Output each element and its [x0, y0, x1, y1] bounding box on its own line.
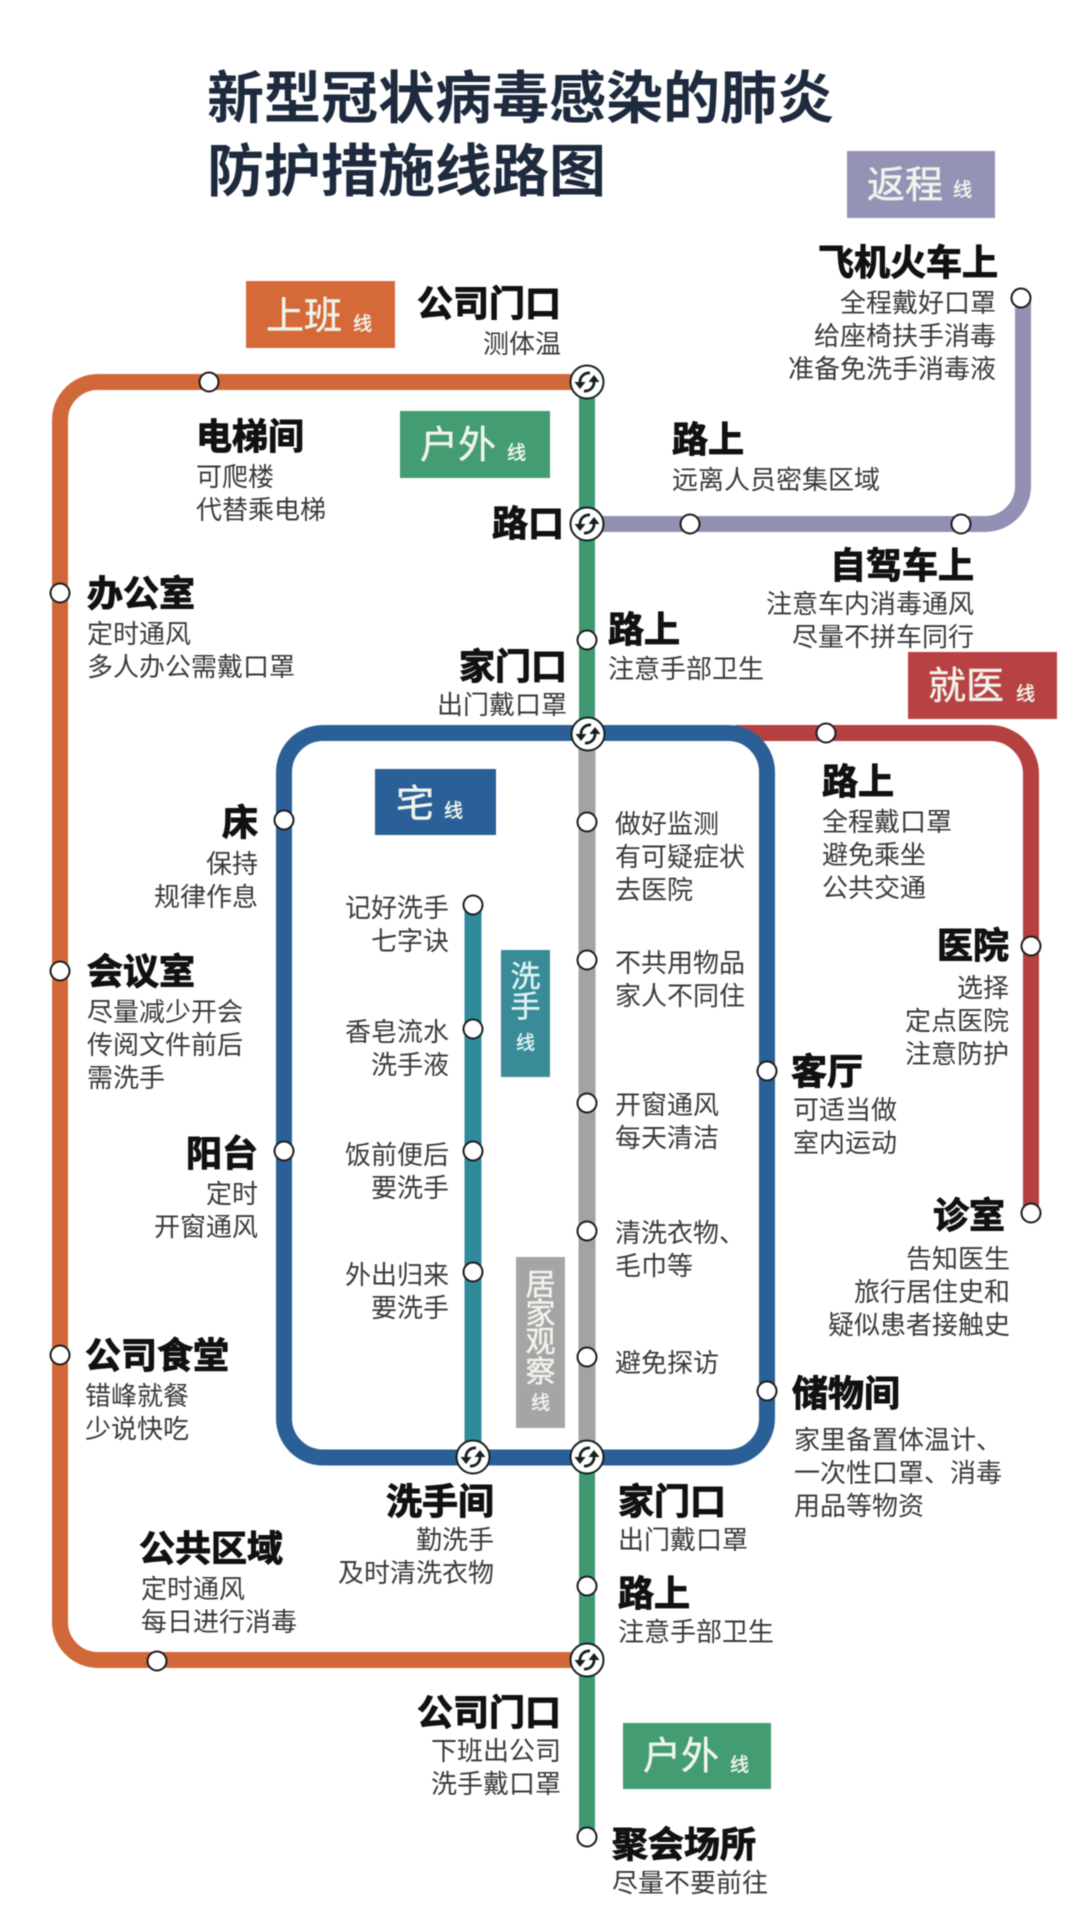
hand washing notes [345, 893, 449, 1323]
note: 不共用物品: 家人不同住 [615, 981, 745, 1011]
stop: 办公室: 定时通风 [87, 619, 191, 649]
stop: 会议室: 会议室 [87, 951, 195, 992]
line label: 宅: 宅 [396, 784, 434, 826]
stop: 飞机火车上: 准备免洗手消毒液 [788, 354, 996, 384]
note: 开窗通风 [615, 1090, 719, 1153]
stop: 飞机火车上: 给座椅扶手消毒 [814, 320, 996, 350]
stop: 公司门口 bottom [417, 1692, 561, 1799]
line label: 洗手: 线 [516, 1033, 535, 1054]
stop: 办公室: 多人办公需戴口罩 [87, 652, 295, 682]
stop: 医院: 医院 [937, 925, 1009, 966]
line label: 洗手 [501, 950, 550, 1077]
note: 开窗通风: 开窗通风 [615, 1090, 719, 1120]
stop: 床: 规律作息 [154, 882, 258, 912]
line label: 宅 [375, 769, 496, 835]
stop: 公司门口 bottom: 公司门口 [417, 1692, 561, 1733]
line label: 就医 [908, 652, 1057, 719]
stop: 公司门口 top [417, 283, 561, 358]
note: 开窗通风: 每天清洁 [615, 1123, 719, 1153]
note: 外出归来: 要洗手 [371, 1293, 449, 1323]
line label: 居家观察: 观 [526, 1326, 556, 1359]
stop: 路口: 路口 [492, 503, 564, 544]
stop: 家门口 upper [437, 646, 567, 720]
stop: 储物间: 储物间 [792, 1373, 900, 1414]
stop: 公司食堂: 公司食堂 [85, 1335, 229, 1376]
stop: 办公室 [86, 573, 295, 682]
note: 做好监测 [614, 809, 745, 905]
stop: 家门口 upper: 出门戴口罩 [437, 690, 567, 720]
stop: 洗手间: 及时清洗衣物 [338, 1558, 494, 1588]
line label: 户外 upper [400, 411, 550, 478]
stop: 洗手间: 洗手间 [386, 1481, 494, 1522]
note: 记好洗手: 七字诀 [371, 926, 449, 956]
stop: 路上 return [672, 419, 880, 494]
stop: 诊室 [828, 1195, 1010, 1340]
stop: 路上 hospital: 路上 [822, 761, 894, 802]
stop: 路上 green lower [618, 1573, 774, 1647]
stop: 家门口 lower [618, 1481, 748, 1555]
stop: 路上 green upper: 注意手部卫生 [608, 654, 764, 684]
title: 新型冠状病毒感染的肺炎 [207, 67, 834, 131]
stop: 家门口 lower: 出门戴口罩 [618, 1525, 748, 1555]
stop: 储物间: 家里备置体温计、 [794, 1425, 1002, 1455]
stop: 公司门口 bottom: 下班出公司 [431, 1736, 561, 1766]
line label: 就医: 线 [1016, 684, 1035, 705]
line: hospital red [735, 733, 1031, 1213]
stop: 公司食堂: 错峰就餐 [85, 1380, 189, 1410]
stop: 自驾车上: 尽量不拼车同行 [792, 622, 974, 652]
stop: 会议室: 需洗手 [87, 1063, 165, 1093]
note: 外出归来: 外出归来 [345, 1260, 449, 1290]
stop: 会议室 [86, 951, 243, 1093]
stop: 会议室: 尽量减少开会 [87, 997, 243, 1027]
stop: 阳台 [154, 1133, 258, 1242]
line label: 居家观察: 居 [526, 1269, 556, 1302]
line: hand wash teal [464, 905, 482, 1457]
line label: 居家观察: 察 [526, 1356, 556, 1389]
stop: 飞机火车上: 全程戴好口罩 [840, 288, 996, 318]
stop: 客厅: 客厅 [791, 1051, 863, 1092]
note: 记好洗手: 记好洗手 [345, 893, 449, 923]
stop: 公共区域: 公共区域 [139, 1528, 283, 1569]
line label: 户外 lower: 户外 [643, 1736, 719, 1778]
stop: 客厅 [790, 1051, 897, 1158]
stop: 阳台: 开窗通风 [154, 1212, 258, 1242]
line label: 返程: 返程 [867, 165, 943, 207]
stop: 路上 return: 路上 [672, 419, 744, 460]
stop: 医院: 定点医院 [905, 1006, 1009, 1036]
note: 香皂流水: 香皂流水 [345, 1017, 449, 1047]
note: 不共用物品: 不共用物品 [615, 948, 745, 978]
line label: 户外 lower [623, 1723, 771, 1789]
stop: 家门口 lower: 家门口 [618, 1481, 726, 1522]
interchange icons [456, 366, 604, 1676]
line label: 户外 lower: 线 [730, 1755, 749, 1776]
stop: 路上 green lower: 路上 [618, 1573, 690, 1614]
stop: 阳台: 定时 [206, 1178, 258, 1208]
stop: 客厅: 可适当做 [793, 1095, 897, 1125]
stop: 储物间: 用品等物资 [794, 1491, 924, 1521]
line label: 返程 [847, 151, 995, 218]
stop: 飞机火车上: 飞机火车上 [818, 242, 998, 283]
line label: 洗手: 洗 [510, 961, 540, 994]
home observation notes [614, 809, 745, 1378]
line label: 就医: 就医 [928, 666, 1004, 708]
stop: 床 [154, 802, 259, 912]
line: commute orange [60, 382, 587, 1660]
note: 做好监测: 去医院 [615, 875, 693, 905]
line label: 户外 upper: 户外 [420, 425, 496, 467]
stop: 公司食堂: 少说快吃 [85, 1414, 189, 1444]
stop: 家门口 upper: 家门口 [459, 646, 567, 687]
line label: 居家观察 [516, 1257, 565, 1428]
note: 清洗衣物: 毛巾等 [615, 1251, 693, 1281]
stations [50, 288, 1040, 1846]
stop: 电梯间: 代替乘电梯 [196, 494, 326, 524]
title [207, 67, 834, 204]
stop: 聚会场所 [612, 1824, 768, 1898]
stop: 诊室: 告知医生 [906, 1244, 1010, 1274]
note: 清洗衣物 [615, 1218, 745, 1281]
stop: 路上 green upper [608, 609, 764, 684]
stop: 床: 床 [222, 802, 258, 843]
line: home observation gray [578, 733, 596, 1457]
note: 香皂流水 [345, 1017, 449, 1080]
stop: 公共区域: 每日进行消毒 [141, 1606, 297, 1636]
stop: 电梯间: 电梯间 [196, 416, 304, 457]
title: 防护措施线路图 [207, 140, 606, 204]
line label: 返程: 线 [953, 180, 972, 201]
line: outdoor green [579, 382, 595, 1837]
stop: 路上 hospital: 公共交通 [822, 872, 926, 902]
stop: 电梯间: 可爬楼 [196, 462, 274, 492]
line label: 宅: 线 [444, 801, 463, 822]
stop: 办公室: 办公室 [87, 573, 195, 614]
stop: 洗手间: 勤洗手 [416, 1525, 494, 1555]
note: 记好洗手 [345, 893, 449, 956]
line label: 上班: 线 [353, 314, 372, 335]
stop: 路上 hospital [822, 761, 952, 902]
stop: 自驾车上 [766, 545, 974, 652]
stop: 飞机火车上 [788, 242, 998, 384]
stop: 储物间 [791, 1373, 1002, 1521]
stop: 公司食堂 [85, 1335, 229, 1444]
line label: 上班: 上班 [266, 296, 342, 338]
note: 饭前便后 [345, 1140, 449, 1203]
stop: 阳台: 阳台 [186, 1133, 258, 1174]
stop: 公司门口 bottom: 洗手戴口罩 [431, 1769, 561, 1799]
stop: 诊室: 旅行居住史和 [854, 1277, 1010, 1307]
note: 外出归来 [345, 1260, 449, 1323]
line label: 洗手: 手 [510, 991, 540, 1024]
stop: 公共区域: 定时通风 [141, 1574, 245, 1604]
stop: 聚会场所: 聚会场所 [612, 1824, 756, 1865]
stop: 电梯间 [196, 416, 326, 524]
note: 不共用物品 [615, 948, 745, 1011]
stop: 诊室: 疑似患者接触史 [828, 1310, 1010, 1340]
stop: 路上 green upper: 路上 [608, 609, 680, 650]
stop: 洗手间 [338, 1481, 494, 1588]
stop: 床: 保持 [206, 849, 258, 879]
line: return purple [587, 298, 1023, 524]
stop: 路上 green lower: 注意手部卫生 [618, 1617, 774, 1647]
stop: 诊室: 诊室 [933, 1195, 1005, 1236]
stop: 医院: 注意防护 [905, 1039, 1009, 1069]
line label: 上班 [246, 281, 395, 348]
line: home blue [284, 733, 767, 1458]
line label: 户外 upper: 线 [507, 443, 526, 464]
stop: 聚会场所: 尽量不要前往 [612, 1868, 768, 1898]
stop: 公共区域 [139, 1528, 297, 1636]
note: 避免探访: 避免探访 [615, 1348, 719, 1378]
stop: 公司门口 top: 公司门口 [417, 283, 561, 324]
stop: 路上 hospital: 全程戴口罩 [822, 806, 952, 836]
note: 做好监测: 做好监测 [615, 809, 719, 839]
stop: 医院 [905, 925, 1010, 1069]
stop: 客厅: 室内运动 [793, 1128, 897, 1158]
note: 香皂流水: 洗手液 [371, 1050, 449, 1080]
line label: 居家观察: 家 [526, 1298, 556, 1331]
stop: 公司门口 top: 测体温 [483, 328, 561, 358]
note: 做好监测: 有可疑症状 [615, 842, 745, 872]
stop: 医院: 选择 [957, 973, 1009, 1003]
line label: 居家观察: 线 [531, 1393, 550, 1414]
note: 饭前便后: 饭前便后 [345, 1140, 449, 1170]
note: 饭前便后: 要洗手 [371, 1173, 449, 1203]
stop: 路上 return: 远离人员密集区域 [672, 464, 880, 494]
stop: 自驾车上: 注意车内消毒通风 [766, 589, 974, 619]
stop: 会议室: 传阅文件前后 [87, 1030, 243, 1060]
stop: 储物间: 一次性口罩、消毒 [794, 1458, 1002, 1488]
stop: 路上 hospital: 避免乘坐 [822, 840, 926, 870]
stop: 自驾车上: 自驾车上 [830, 545, 974, 586]
note: 清洗衣物: 清洗衣物、 [615, 1218, 745, 1248]
